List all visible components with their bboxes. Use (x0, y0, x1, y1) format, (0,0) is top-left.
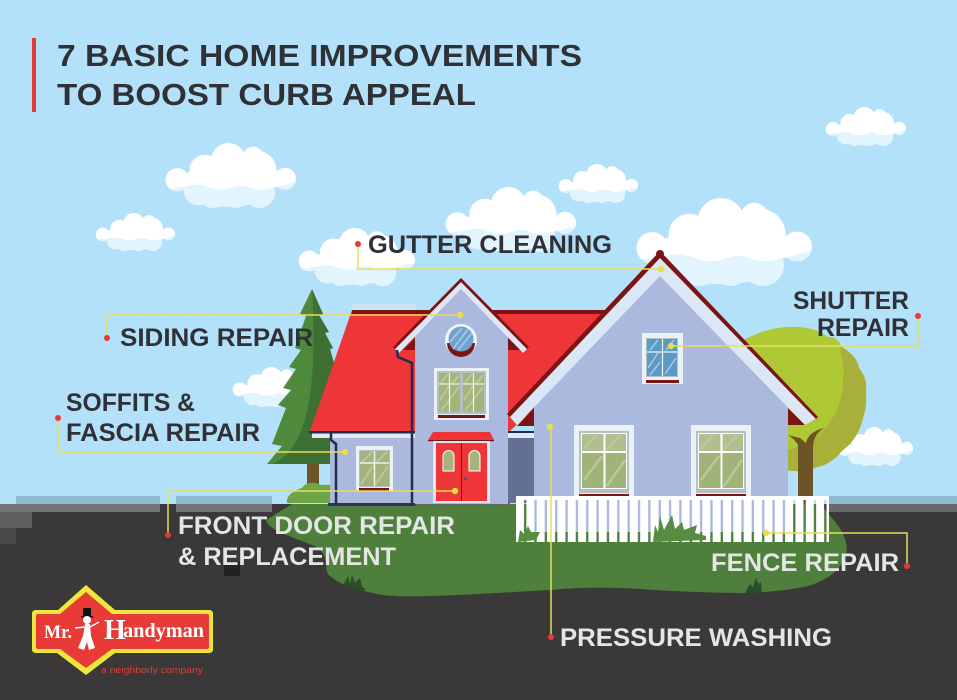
logo (32, 585, 213, 675)
label: soffits and fascia repair: SOFFITS & (66, 389, 195, 417)
downpipes (397, 350, 412, 505)
canopy shade (780, 340, 866, 471)
label: shutter repair: REPAIR (817, 314, 909, 342)
sky background (0, 0, 957, 510)
cloud: above left roof (299, 228, 415, 286)
label: shutter repair: SHUTTER (793, 287, 909, 315)
round tree (740, 327, 866, 510)
canopy light (740, 327, 843, 450)
ground edge artefacts (0, 496, 957, 576)
label: gutter cleaning: GUTTER CLEANING (368, 231, 612, 259)
fascia (309, 431, 416, 434)
title text: TO BOOST CURB APPEAL (57, 77, 476, 112)
cloud: upper left (166, 143, 296, 208)
grass tuft left (518, 526, 540, 542)
clouds (96, 107, 913, 466)
main gable (507, 250, 818, 532)
tower window (434, 368, 489, 420)
label: soffits and fascia repair (66, 389, 260, 447)
logo wordmark (44, 615, 204, 646)
title text (57, 38, 582, 112)
label: front door repair and replacement: & REPLACEMENT (178, 543, 396, 571)
logo wordmark: Mr. (44, 622, 72, 643)
front door (433, 441, 490, 503)
callout lines (58, 244, 918, 637)
tower gable (393, 278, 529, 504)
label: shutter repair (793, 287, 909, 342)
label: front door repair and replacement (178, 512, 455, 571)
callout dots (55, 241, 921, 640)
base line (328, 503, 416, 506)
logo wordmark: H (104, 615, 126, 646)
left wing wall (330, 437, 416, 504)
round window (445, 324, 477, 357)
logo figure (75, 608, 99, 650)
pine foliage (267, 289, 336, 464)
trunk (788, 428, 824, 510)
label: siding repair: SIDING REPAIR (120, 324, 313, 352)
cloud: behind pine tree (233, 367, 313, 407)
grass tuft centre (653, 515, 706, 542)
left roof (310, 310, 640, 431)
cloud: far left (96, 213, 175, 251)
label: front door repair and replacement: FRONT DOOR REPAIR (178, 512, 455, 540)
cloud: top right (826, 107, 906, 146)
logo badge (32, 585, 213, 675)
cloud: behind gutter label (446, 187, 576, 252)
bush (287, 483, 332, 503)
gable lower right window (691, 425, 751, 497)
lawn (266, 504, 847, 596)
label: fence repair: FENCE REPAIR (711, 549, 899, 577)
title (32, 38, 582, 112)
picket fence (516, 496, 829, 542)
cloud: centre small (559, 164, 638, 203)
roof highlight (352, 304, 416, 310)
label: soffits and fascia repair: FASCIA REPAIR (66, 419, 260, 447)
roof ridge (352, 310, 608, 314)
title text: 7 BASIC HOME IMPROVEMENTS (57, 38, 582, 73)
door awning (428, 432, 494, 440)
ground (0, 504, 957, 700)
title accent bar (32, 38, 36, 112)
pine tree (267, 289, 336, 492)
pine trunk (307, 462, 319, 492)
cloud: behind gable (636, 198, 812, 286)
recessed wall (508, 437, 538, 503)
house (309, 250, 818, 532)
logo tagline: a neighborly company (101, 665, 204, 675)
cloud: behind round tree (838, 427, 913, 466)
soffit (312, 433, 416, 438)
logo wordmark: andyman (123, 620, 204, 642)
label: pressure washing: PRESSURE WASHING (560, 624, 832, 652)
gable lower left window (574, 425, 634, 497)
lawn grass tufts (343, 574, 762, 593)
lower left window (356, 446, 393, 491)
gable upper window (642, 333, 683, 384)
